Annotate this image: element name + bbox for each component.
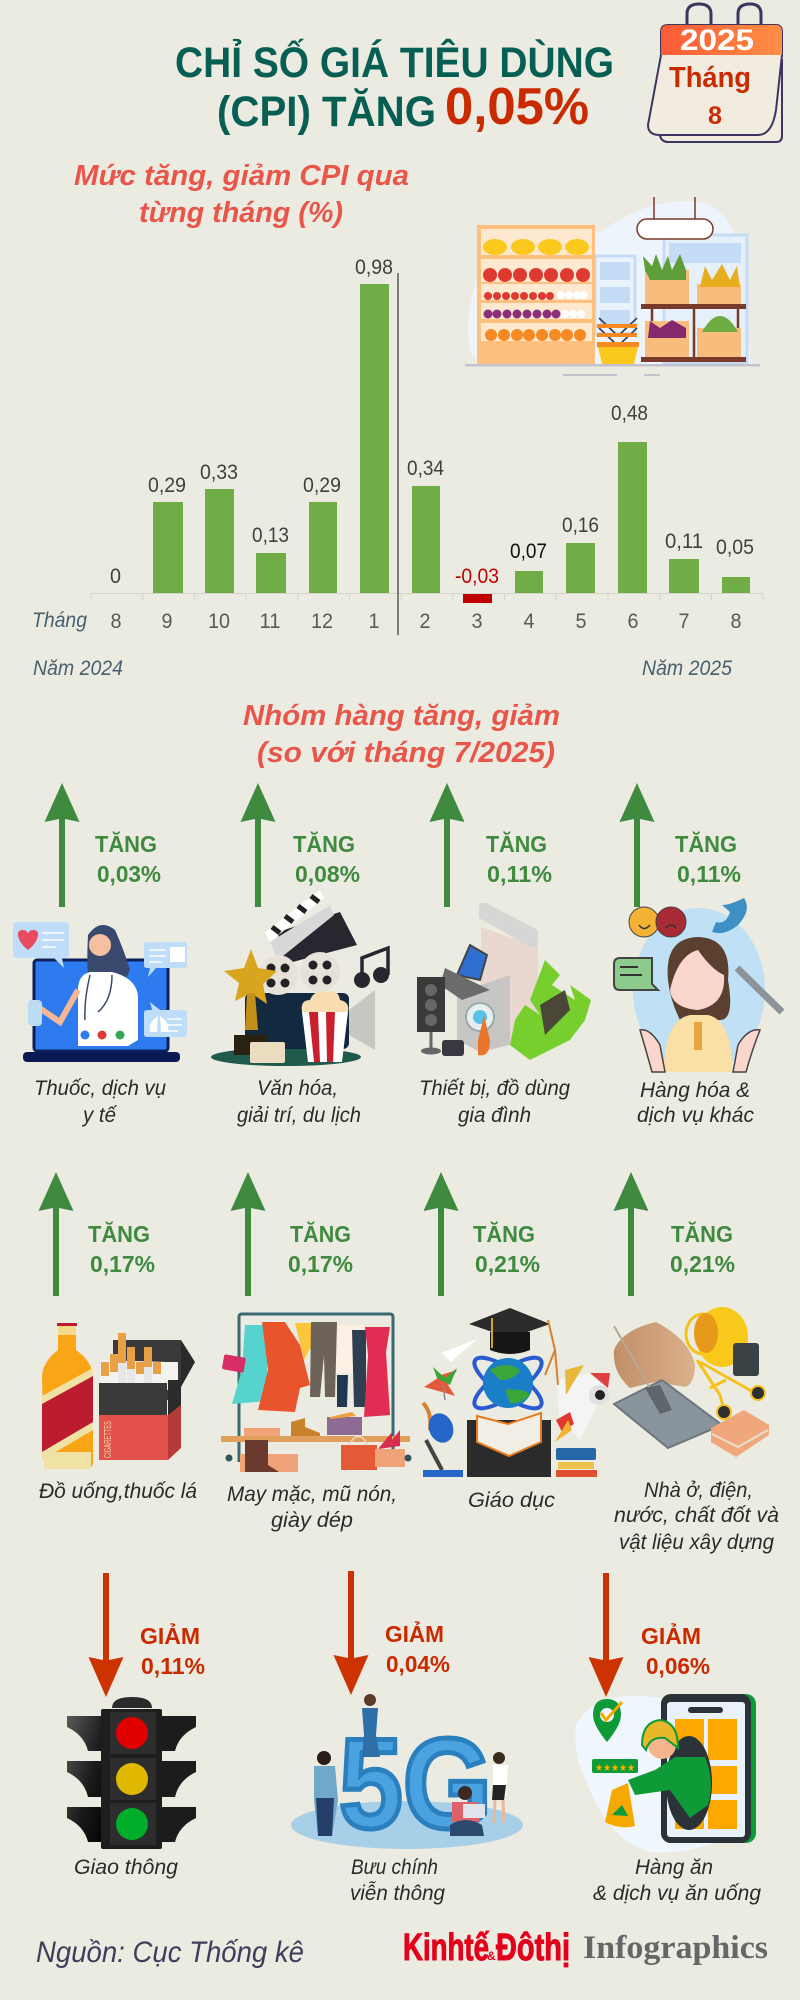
value labels: 0,33 bbox=[200, 460, 238, 484]
label: vật liệu xây dựng bbox=[619, 1530, 774, 1554]
value labels: 0,16 bbox=[562, 513, 599, 537]
icon: bottle and cigarettes bbox=[42, 1323, 195, 1469]
month labels: 1 bbox=[368, 609, 380, 633]
arrow up bbox=[240, 783, 276, 907]
icon: film, trophy and popcorn bbox=[211, 890, 389, 1066]
arrow up bbox=[230, 1172, 266, 1296]
month labels: 11 bbox=[260, 609, 280, 633]
heading: groups of goods bbox=[243, 700, 560, 769]
label bbox=[237, 1076, 361, 1127]
value: GIẢM bbox=[641, 1621, 701, 1649]
label: giày dép bbox=[271, 1508, 353, 1532]
label: & dịch vụ ăn uống bbox=[593, 1881, 761, 1905]
label: y tế bbox=[81, 1103, 118, 1127]
value labels: 0,29 bbox=[148, 473, 186, 497]
value: GIẢM bbox=[385, 1619, 444, 1647]
panel: culture, entertainment, tourism bbox=[211, 783, 389, 1127]
heading: groups of goods: (so với tháng 7/2025) bbox=[257, 737, 555, 769]
icon: construction materials bbox=[614, 1307, 769, 1457]
value: 0,03% bbox=[97, 861, 161, 887]
value: 0,04% bbox=[386, 1651, 450, 1677]
label: May mặc, mũ nón, bbox=[227, 1482, 397, 1506]
value bbox=[88, 1220, 155, 1277]
value: TĂNG bbox=[473, 1220, 535, 1247]
value bbox=[641, 1621, 710, 1679]
label: Bưu chính bbox=[351, 1855, 438, 1879]
label bbox=[614, 1478, 779, 1554]
panel: other goods and services bbox=[614, 783, 782, 1127]
label bbox=[593, 1855, 761, 1905]
axis bbox=[91, 593, 763, 600]
value labels: 0,05 bbox=[716, 535, 754, 559]
panel: transport bbox=[67, 1573, 205, 1879]
value: GIẢM bbox=[140, 1621, 200, 1649]
label: Thiết bị, đồ dùng bbox=[419, 1076, 570, 1100]
axis title: Tháng bbox=[32, 609, 87, 632]
month labels bbox=[110, 609, 742, 633]
logo: Kinhtế bbox=[403, 1927, 490, 1969]
panel: household appliances bbox=[417, 783, 591, 1127]
value bbox=[288, 1220, 353, 1277]
panel: education bbox=[423, 1172, 610, 1512]
value labels: -0,03 bbox=[455, 564, 499, 588]
year label 2024: Năm 2024 bbox=[33, 657, 123, 680]
label: gia đình bbox=[458, 1103, 531, 1127]
label bbox=[227, 1482, 397, 1532]
value bbox=[95, 830, 161, 887]
logo: & bbox=[487, 1949, 496, 1963]
icon: calendar 2025 tháng 8: 2025 bbox=[680, 24, 754, 57]
icon: calendar 2025 tháng 8 bbox=[648, 4, 782, 142]
label bbox=[419, 1076, 570, 1127]
icon: appliances and recycling bbox=[417, 903, 591, 1060]
icon: customer service woman bbox=[614, 898, 782, 1072]
arrow up bbox=[620, 783, 654, 907]
label: Hàng hóa & bbox=[640, 1078, 750, 1102]
icon: calendar 2025 tháng 8: 8 bbox=[708, 102, 722, 130]
value labels: 0,07 bbox=[510, 539, 547, 563]
panel: drinks and tobacco bbox=[38, 1172, 197, 1503]
month labels: 5 bbox=[576, 609, 587, 633]
icon: food delivery on phone bbox=[575, 1694, 756, 1853]
logo: Đôthị bbox=[496, 1927, 570, 1969]
title: 0,05% bbox=[445, 78, 589, 136]
arrow up bbox=[424, 1172, 458, 1296]
label: nước, chất đốt và bbox=[614, 1503, 779, 1527]
icon: calendar 2025 tháng 8: Tháng bbox=[669, 62, 751, 94]
month labels: 8 bbox=[730, 609, 742, 633]
panel: medicine and health services bbox=[13, 783, 187, 1127]
arrow up bbox=[430, 783, 464, 907]
arrow up bbox=[38, 1172, 74, 1296]
value: TĂNG bbox=[675, 830, 737, 857]
value labels: 0,11 bbox=[665, 529, 703, 553]
arrow up bbox=[614, 1172, 648, 1296]
value: TĂNG bbox=[95, 830, 157, 857]
label: Đồ uống,thuốc lá bbox=[39, 1479, 197, 1503]
panel: catering and food services bbox=[575, 1573, 761, 1905]
icon: 5G with people: 5G bbox=[339, 1713, 492, 1856]
value: TĂNG bbox=[486, 830, 547, 857]
value labels: 0,98 bbox=[355, 255, 393, 279]
value: 0,17% bbox=[90, 1251, 155, 1277]
label: Nhà ở, điện, bbox=[644, 1478, 753, 1502]
value bbox=[486, 830, 552, 887]
value labels: 0,29 bbox=[303, 473, 341, 497]
value bbox=[140, 1621, 205, 1679]
panel: housing, electricity, water, fuel and construction materials bbox=[614, 1172, 779, 1554]
month labels: 8 bbox=[110, 609, 122, 633]
heading: CPI by month bbox=[74, 160, 409, 229]
panel: clothing and footwear bbox=[221, 1172, 412, 1532]
title: CHỈ SỐ GIÁ TIÊU DÙNG bbox=[175, 38, 614, 87]
bars bbox=[153, 284, 750, 593]
label bbox=[350, 1855, 445, 1905]
value: TĂNG bbox=[293, 830, 355, 857]
icon: doctor on laptop bbox=[13, 922, 187, 1062]
label: Văn hóa, bbox=[257, 1076, 338, 1100]
value bbox=[670, 1220, 735, 1277]
value bbox=[473, 1220, 540, 1277]
heading: CPI by month: Mức tăng, giảm CPI qua bbox=[74, 160, 409, 192]
logo bbox=[403, 1927, 768, 1969]
arrow down bbox=[588, 1573, 624, 1697]
heading: CPI by month: từng tháng (%) bbox=[139, 197, 343, 229]
icon: traffic light bbox=[67, 1697, 196, 1849]
bar chart: CPI by month bbox=[32, 255, 763, 680]
value: 0,21% bbox=[670, 1251, 735, 1277]
value: 0,08% bbox=[295, 861, 360, 887]
value: TĂNG bbox=[671, 1220, 733, 1247]
year label 2025: Năm 2025 bbox=[642, 657, 732, 680]
value labels: 0,13 bbox=[252, 523, 289, 547]
logo: Infographics bbox=[583, 1930, 768, 1966]
month labels: 12 bbox=[311, 609, 333, 633]
label: Thuốc, dịch vụ bbox=[34, 1076, 166, 1100]
source: Nguồn: Cục Thống kê bbox=[36, 1936, 304, 1969]
month labels: 2 bbox=[420, 609, 430, 633]
value bbox=[675, 830, 741, 887]
value labels bbox=[110, 255, 754, 588]
value: TĂNG bbox=[290, 1220, 351, 1247]
label: Giao thông bbox=[74, 1855, 178, 1879]
heading: groups of goods: Nhóm hàng tăng, giảm bbox=[243, 700, 560, 732]
value: 0,06% bbox=[646, 1653, 710, 1679]
label: viễn thông bbox=[350, 1879, 445, 1905]
label: giải trí, du lịch bbox=[237, 1103, 361, 1127]
label bbox=[637, 1078, 754, 1127]
value: 0,17% bbox=[288, 1251, 353, 1277]
icon: bottle and cigarettes: CIGARETTES bbox=[103, 1421, 114, 1458]
month labels: 9 bbox=[162, 609, 172, 633]
panel: post and telecommunications bbox=[291, 1571, 523, 1905]
value labels: 0,48 bbox=[611, 401, 648, 425]
month labels: 4 bbox=[524, 609, 535, 633]
label: Giáo dục bbox=[468, 1488, 555, 1512]
icon: food delivery on phone: ★★★★★ bbox=[595, 1763, 635, 1774]
arrow up bbox=[44, 783, 80, 907]
arrow down bbox=[88, 1573, 124, 1697]
label: Hàng ăn bbox=[635, 1855, 713, 1879]
value: 0,21% bbox=[475, 1251, 540, 1277]
value: 0,11% bbox=[141, 1653, 205, 1679]
month labels: 6 bbox=[628, 609, 639, 633]
month labels: 3 bbox=[472, 609, 483, 633]
negative bar bbox=[463, 594, 492, 603]
value: 0,11% bbox=[677, 861, 741, 887]
icon: 5G with people bbox=[291, 1694, 523, 1856]
icon: clothes rack bbox=[221, 1314, 412, 1472]
label: dịch vụ khác bbox=[637, 1103, 754, 1127]
arrow down bbox=[334, 1571, 368, 1695]
value: TĂNG bbox=[88, 1220, 150, 1247]
value labels: 0 bbox=[110, 564, 121, 588]
title: (CPI) TĂNG bbox=[217, 88, 436, 136]
month labels: 10 bbox=[208, 609, 230, 633]
icon: education objects bbox=[423, 1308, 610, 1477]
label bbox=[34, 1076, 166, 1127]
month labels: 7 bbox=[678, 609, 690, 633]
year divider bbox=[398, 273, 399, 635]
value labels: 0,34 bbox=[407, 456, 444, 480]
title bbox=[175, 38, 614, 136]
value bbox=[385, 1619, 450, 1677]
value: 0,11% bbox=[487, 861, 552, 887]
value bbox=[293, 830, 360, 887]
icon: supermarket shelves bbox=[465, 197, 760, 376]
